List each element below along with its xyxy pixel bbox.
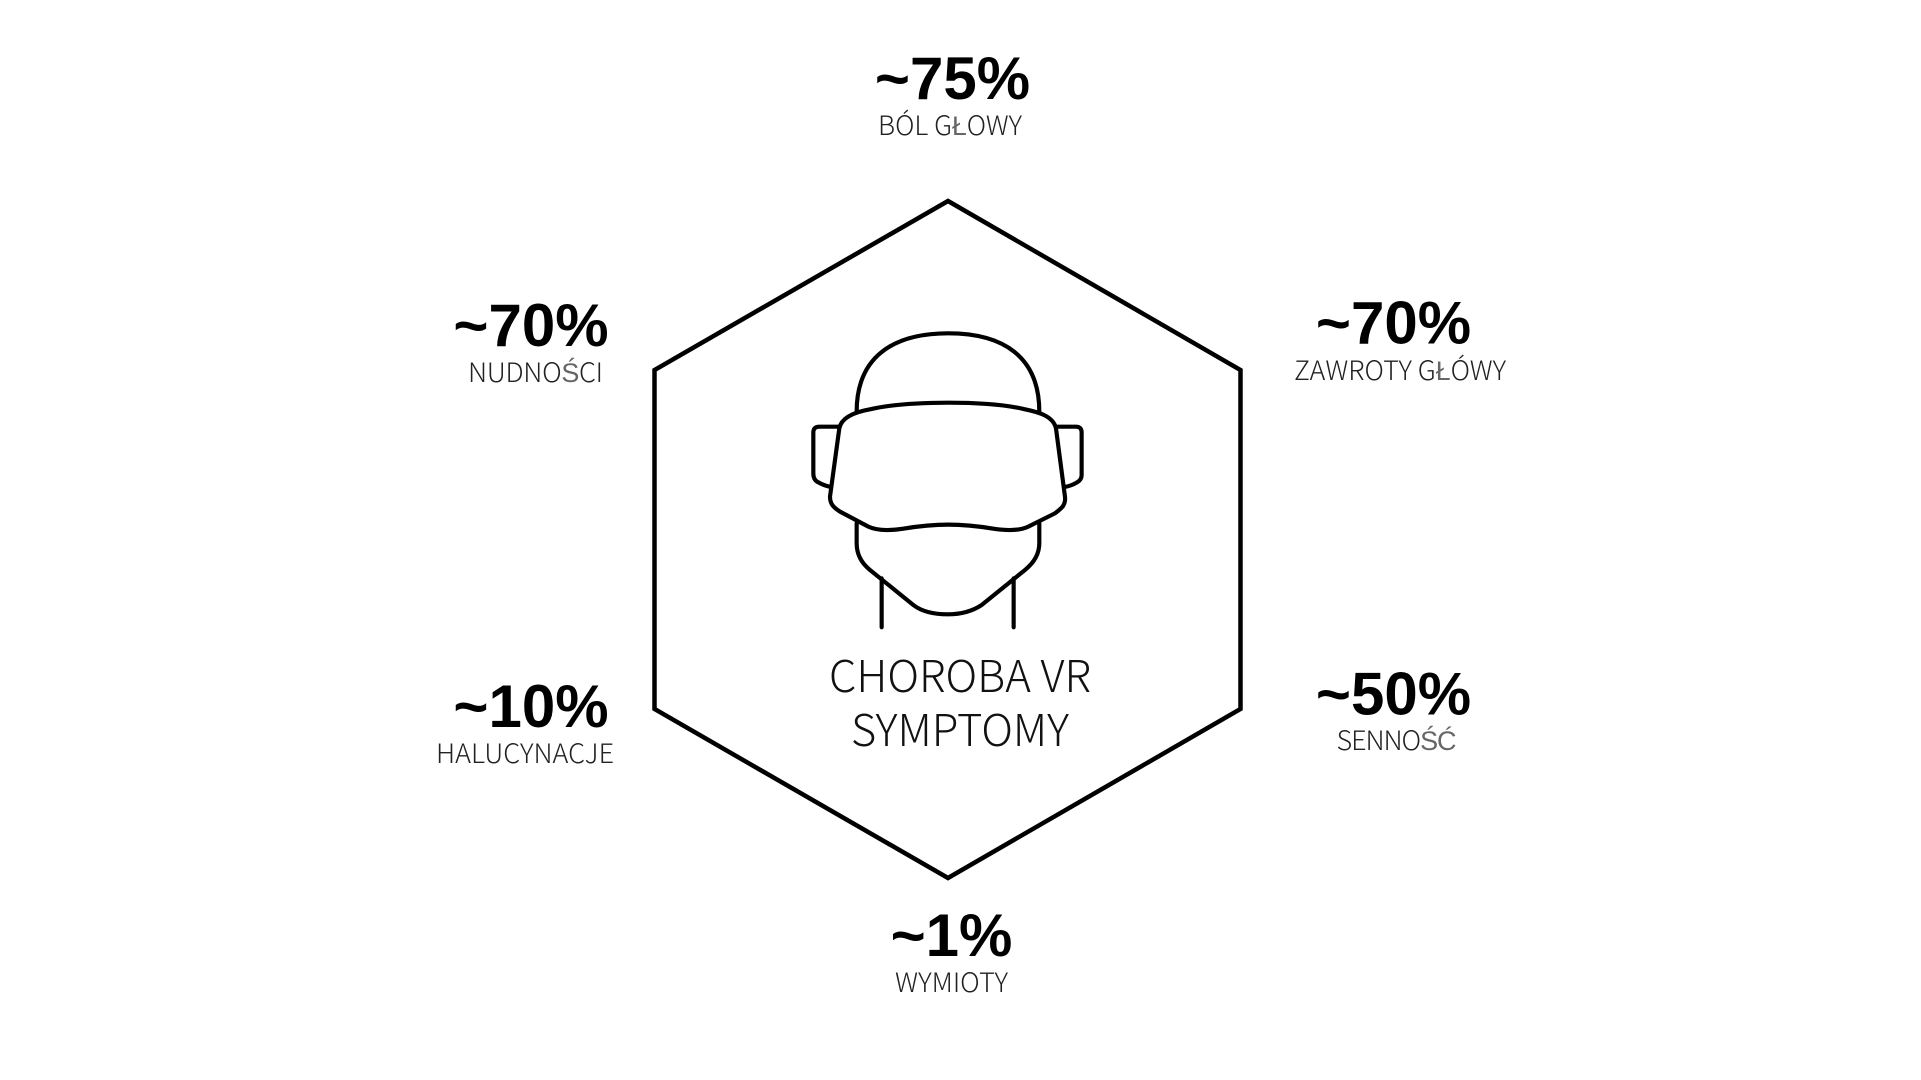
stat: hallucinations: ~10% [453, 673, 609, 740]
hexagon frame [654, 201, 1240, 878]
title: SYMPTOMY [851, 695, 1069, 759]
stat: vomiting [891, 902, 1012, 1000]
stat: headache: BÓL GŁOWY [878, 104, 1022, 143]
stat: drowsiness [1316, 660, 1471, 758]
icon: head with VR headset [813, 333, 1082, 627]
title [829, 641, 1091, 759]
title: CHOROBA VR [829, 641, 1091, 705]
stat: nausea [453, 292, 609, 390]
stat: drowsiness: ~50% [1316, 660, 1471, 728]
stat: dizziness: ZAWROTY GŁÓWY [1294, 349, 1506, 388]
stat: headache: ~75% [875, 45, 1030, 112]
stat: vomiting: WYMIOTY [895, 961, 1008, 1000]
stat: dizziness: ~70% [1316, 290, 1471, 356]
stat: headache [875, 45, 1030, 143]
stat: hallucinations [436, 673, 614, 771]
stat: nausea: ~70% [453, 292, 609, 359]
stat: drowsiness: SENNOŚĆ [1336, 719, 1456, 758]
stat: hallucinations: HALUCYNACJE [436, 732, 614, 771]
stat: vomiting: ~1% [891, 902, 1012, 969]
stat: nausea: NUDNOŚCI [468, 351, 603, 390]
stat: dizziness [1294, 290, 1506, 388]
